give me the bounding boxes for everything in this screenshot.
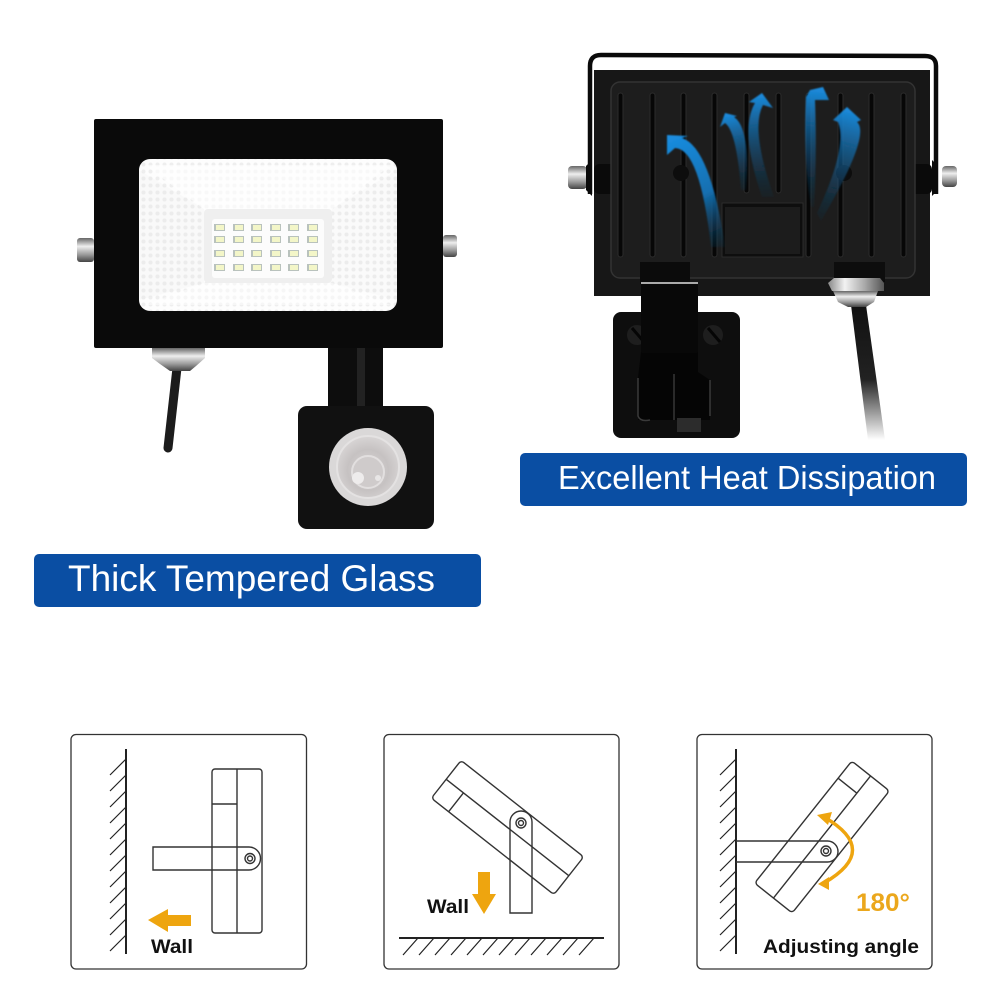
rotation arrow [817,812,852,890]
lamp housing [94,119,443,348]
bracket arm [153,847,260,870]
banner: excellent heat dissipation [520,453,967,506]
mounting bolt rear right [942,166,957,187]
heat sink panel [611,82,915,278]
adjusting angle label: Adjusting angle [763,936,919,958]
arrow pointing to wall [148,909,191,932]
heat flow arrow 5 [817,107,861,221]
wall label: Wall [427,896,469,918]
heat flow arrow 2 [720,113,747,190]
motion sensor head [298,406,434,529]
panel: wall mount perpendicular [71,734,306,969]
lamp outline [212,769,262,933]
pivot blocks [586,160,938,196]
icon: power cable rear [851,305,885,440]
rear housing [594,70,930,296]
tilted lamp outline [431,760,584,895]
U bracket handle [590,55,936,194]
arrow pointing to surface [472,872,496,914]
rotated lamp outline [755,761,889,913]
reflector panel [139,159,397,311]
bracket arm [510,811,532,913]
mounting bolt rear left [568,166,587,189]
hinge [638,352,710,432]
banner: thick tempered glass [34,554,481,607]
mounting bolt right [443,235,457,257]
wall with hatching [720,749,736,954]
banner: thick tempered glass: Thick Tempered Glass [68,558,435,599]
bracket arm [736,841,838,862]
sensor arm [328,346,383,408]
heat flow arrow 4 [805,87,829,207]
front view floodlight [77,119,457,529]
panel: ceiling or ground mount [384,734,619,969]
wall label: Wall [151,936,193,958]
cable gland front [152,348,205,371]
icon: power cable front [168,368,177,448]
heat flow arrow 3 [748,93,774,197]
heat flow arrow 1 [667,135,725,247]
cable gland rear [828,262,885,307]
mounting bolt left [77,238,94,262]
wall with hatching [110,749,126,954]
ground with hatching [399,938,604,955]
mounting bracket plate [613,312,740,438]
LED module [204,209,332,283]
panel: adjusting angle [697,734,932,969]
sensor neck [640,262,698,353]
banner: excellent heat dissipation: Excellent Heat Dissipation [558,459,936,496]
180 degree label: 180° [856,889,910,917]
rear view floodlight [568,55,957,440]
